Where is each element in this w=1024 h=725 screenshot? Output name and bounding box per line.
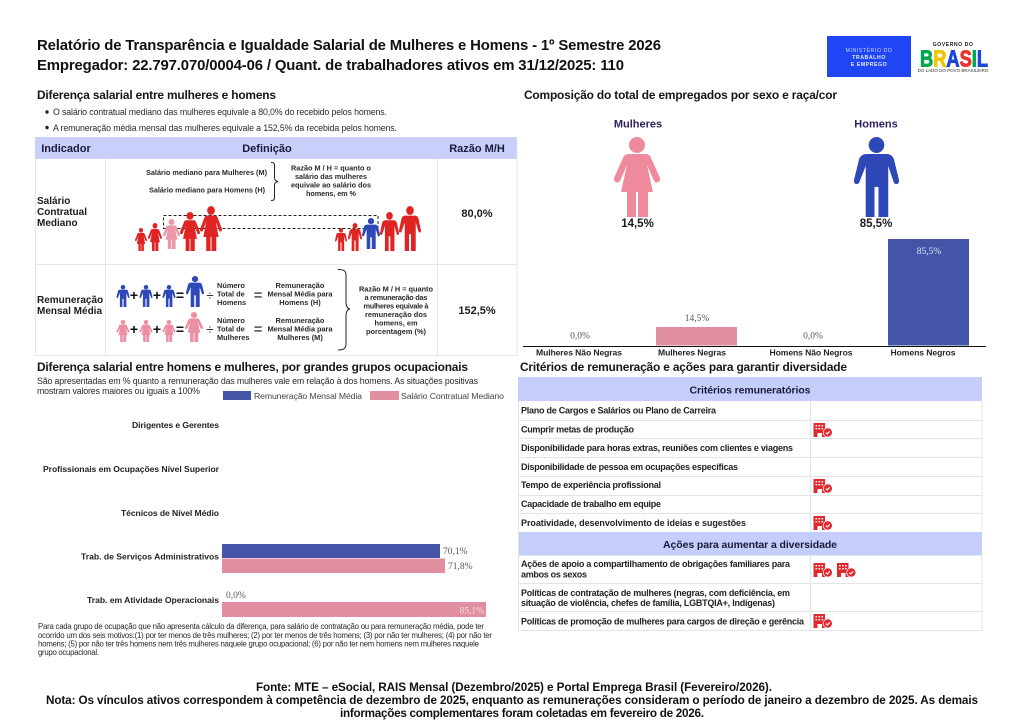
bar chart: raça/cor: 0,0% (803, 332, 823, 342)
table: critérios: Proatividade, desenvolvimento de ideias e sugestões (521, 518, 746, 528)
row: salário contratual mediano: Mediano (37, 218, 78, 229)
row: remuneração mensal média: = (176, 321, 184, 337)
bar chart: grupos ocupacionais: Técnicos de Nível Médio (121, 508, 219, 518)
bar chart: raça/cor (523, 239, 986, 358)
bar chart: grupos ocupacionais: 70,1% (443, 547, 468, 557)
row: remuneração mensal média: Homens (H) (279, 298, 321, 307)
row: remuneração mensal média: + (153, 321, 161, 337)
row: remuneração mensal média: Homens (217, 298, 246, 307)
table: critérios: Disponibilidade de pessoa em ocupações específicas (521, 462, 738, 472)
row: remuneração mensal média (37, 270, 496, 350)
bullet list: A remuneração média mensal das mulheres equivale a 152,5% da recebida pelos homens. (53, 123, 397, 133)
row: remuneração mensal média: = (176, 287, 184, 303)
table: indicadores: Indicador (41, 143, 91, 155)
heading: Diferença salarial entre mulheres e homens (37, 88, 276, 102)
table: critérios: Ações para aumentar a diversidade (663, 539, 837, 551)
row: remuneração mensal média: Mensal Média (37, 306, 102, 317)
row: remuneração mensal média: Número (217, 281, 245, 290)
row: remuneração mensal média: ÷ (206, 322, 214, 337)
footer: fonte e nota: informações complementares foram coletadas em fevereiro de 2026. (340, 707, 704, 720)
legend: Salário Contratual Mediano (401, 391, 504, 401)
table: critérios: Cumprir metas de produção (521, 424, 634, 434)
bar chart: grupos ocupacionais: 0,0% (226, 591, 246, 601)
row: remuneração mensal média: = (254, 287, 263, 304)
icon: soma de mulheres (116, 312, 203, 342)
bar chart: grupos ocupacionais: Profissionais em Ocupações Nível Superior (43, 464, 220, 474)
row: salário contratual mediano: salário das mulheres (295, 172, 367, 181)
description (37, 376, 479, 396)
row: remuneração mensal média: + (153, 287, 161, 303)
row: remuneração mensal média: Número (217, 316, 245, 325)
row: salário contratual mediano: Salário mediano para Homens (H) (149, 186, 266, 194)
row: remuneração mensal média: = (254, 321, 263, 338)
icon: empresa cumpre critério (814, 423, 856, 628)
row: remuneração mensal média: + (130, 287, 138, 303)
row: remuneração mensal média: a remuneração das (364, 293, 428, 302)
value: mulheres: 14,5% (621, 218, 654, 230)
footnote: ocorrido um dos seis motivos:(1) por ter menos de três mulheres; (2) por ter menos de três homens; (3) por não ter mulheres; (4) por não ter (38, 631, 492, 640)
table: critérios: Critérios remuneratórios (690, 384, 811, 396)
logo: Governo do Brasil: GOVERNO DO (933, 42, 973, 48)
logo: Governo do Brasil: DO LADO DO POVO BRASILEIRO (918, 68, 989, 73)
label: Homens: Homens (854, 118, 898, 130)
description: mostram valores maiores ou iguais a 100% (37, 386, 200, 396)
footnote (38, 622, 492, 657)
table: indicadores: Razão M/H (449, 143, 505, 155)
bullet list (45, 107, 397, 133)
panel: diferença salarial entre mulheres e homens (35, 88, 517, 356)
bar chart: raça/cor: Homens Não Negros (770, 348, 853, 358)
row: salário contratual mediano (37, 162, 493, 251)
legend (223, 391, 504, 401)
footer: fonte e nota: Nota: Os vínculos ativos correspondem à competência de dezembro de 2025, enquanto as remunerações consideram o período de janeiro a dezembro de 2025. As demais (46, 694, 978, 707)
logo: Governo do Brasil: BRASIL (920, 46, 988, 72)
row: salário contratual mediano: Salário (37, 196, 70, 207)
logo: Ministério do Trabalho e Emprego: TRABALHO (852, 55, 886, 61)
bar chart: raça/cor: Mulheres Negras (658, 348, 726, 358)
bar chart: grupos ocupacionais: Dirigentes e Gerentes (132, 420, 219, 430)
bar chart: raça/cor: Homens Negros (890, 348, 956, 358)
row: remuneração mensal média: Remuneração (276, 316, 325, 325)
table: critérios: Tempo de experiência profissional (521, 480, 661, 490)
icon: mulher (614, 137, 660, 217)
bar chart: grupos ocupacionais: Trab. em Atividade Operacionais (87, 595, 219, 605)
row: salário contratual mediano: equivale ao salário dos (291, 180, 371, 190)
footnote: Para cada grupo de ocupação que não apresenta cálculo da diferença, para salário de contratação ou para remuneração média, pode ter (38, 622, 484, 631)
logo: Ministério do Trabalho e Emprego: E EMPREGO (851, 62, 887, 68)
panel: critérios de remuneração e ações (518, 360, 982, 631)
row: salário contratual mediano: Contratual (37, 207, 87, 218)
icon: soma de homens (116, 276, 204, 307)
icon: fila de mulheres (135, 206, 222, 251)
bar chart: raça/cor: 0,0% (570, 332, 590, 342)
description: São apresentadas em % quanto a remuneração das mulheres vale em relação à dos homens. As situações positivas (37, 376, 479, 386)
row: remuneração mensal média: Mensal Média para (268, 324, 333, 334)
table: critérios: Políticas de promoção de mulheres para cargos de direção e gerência (521, 616, 805, 626)
row: remuneração mensal média: Total de (217, 290, 245, 298)
footer: fonte e nota (46, 681, 978, 720)
row: remuneração mensal média: Remuneração (276, 281, 325, 290)
row: remuneração mensal média: porcentagem (%) (366, 327, 427, 336)
row: salário contratual mediano: Salário mediano para Mulheres (M) (146, 168, 268, 177)
row: remuneração mensal média: mulheres equivale à (364, 302, 429, 310)
row: remuneração mensal média: Remuneração (37, 295, 103, 306)
table: critérios: situação de violência, chefes de família, LGBTQIA+, Indígenas) (521, 598, 775, 608)
table: critérios: Ações de apoio a compartilhamento de obrigações familiares para (521, 559, 791, 569)
footnote: homens; (5) por não ter três homens nem três mulheres naquele grupo ocupacional; (6) por não ter nem homens nem mulheres naquele (38, 640, 479, 648)
table: indicadores (35, 137, 517, 356)
row: remuneração mensal média: Mulheres (M) (277, 333, 323, 342)
row: remuneração mensal média: + (130, 321, 138, 337)
row: remuneração mensal média: ÷ (206, 288, 214, 303)
row: salário contratual mediano: 80,0% (461, 208, 493, 220)
title: Relatório de Transparência e Igualdade Salarial de Mulheres e Homens - 1º Semestre 2026 (37, 38, 661, 54)
table: indicadores: Definição (242, 143, 292, 155)
row: remuneração mensal média: remuneração dos (365, 310, 427, 319)
bar chart: raça/cor: Mulheres Não Negras (536, 348, 622, 358)
footnote: grupo ocupacional. (38, 648, 99, 657)
row: remuneração mensal média: Razão M / H = quanto (359, 284, 433, 294)
table: critérios: Disponibilidade para horas extras, reuniões com clientes e viagens (521, 443, 793, 453)
legend: Remuneração Mensal Média (254, 391, 362, 401)
row: remuneração mensal média: Total de (217, 324, 245, 334)
icon: homem (854, 137, 899, 217)
label: Mulheres: Mulheres (614, 118, 662, 130)
bullet list: O salário contratual mediano das mulheres equivale a 80,0% do recebido pelos homens. (53, 107, 387, 117)
bar chart: raça/cor: 85,5% (917, 247, 941, 257)
row: salário contratual mediano: Razão M / H = quanto o (291, 164, 372, 172)
icon: fila de homens (335, 206, 421, 251)
footer: fonte e nota: Fonte: MTE – eSocial, RAIS Mensal (Dezembro/2025) e Portal Emprega Brasil (Fevereiro/2026). (256, 681, 772, 694)
bar chart: grupos ocupacionais: Trab. de Serviços Administrativos (81, 552, 219, 562)
table: critérios (518, 377, 982, 631)
row: remuneração mensal média: 152,5% (458, 305, 496, 317)
logo: Ministério do Trabalho e Emprego (827, 36, 911, 77)
bar chart: grupos ocupacionais (43, 420, 486, 617)
panel: diferença por grupos ocupacionais (37, 360, 504, 657)
table: critérios: Políticas de contratação de mulheres (negras, com deficiência, em (521, 588, 790, 598)
bar chart: grupos ocupacionais: 71,8% (448, 562, 473, 572)
logo: Ministério do Trabalho e Emprego: MINISTÉRIO DO (846, 47, 892, 54)
title: Empregador: 22.797.070/0004-06 / Quant. de trabalhadores ativos em 31/12/2025: 110 (37, 58, 624, 74)
table: critérios: ambos os sexos (521, 570, 587, 580)
bar chart: grupos ocupacionais: 85,1% (459, 606, 484, 616)
row: remuneração mensal média: Mensal Média para (268, 290, 333, 298)
table: critérios: Capacidade de trabalho em equipe (521, 499, 661, 509)
row: remuneração mensal média: Mulheres (217, 333, 249, 342)
heading: Diferença salarial entre homens e mulheres, por grandes grupos ocupacionais (37, 360, 468, 374)
row: salário contratual mediano: homens, em % (306, 189, 356, 198)
table: critérios: Plano de Cargos e Salários ou Plano de Carreira (521, 406, 717, 416)
title (37, 38, 661, 74)
heading: Critérios de remuneração e ações para garantir diversidade (520, 360, 847, 374)
value: homens: 85,5% (860, 218, 892, 230)
row: remuneração mensal média: homens, em (374, 318, 418, 328)
panel: composição por sexo e raça/cor (523, 88, 986, 358)
heading: Composição do total de empregados por sexo e raça/cor (524, 88, 837, 102)
bar chart: raça/cor: 14,5% (685, 314, 709, 324)
